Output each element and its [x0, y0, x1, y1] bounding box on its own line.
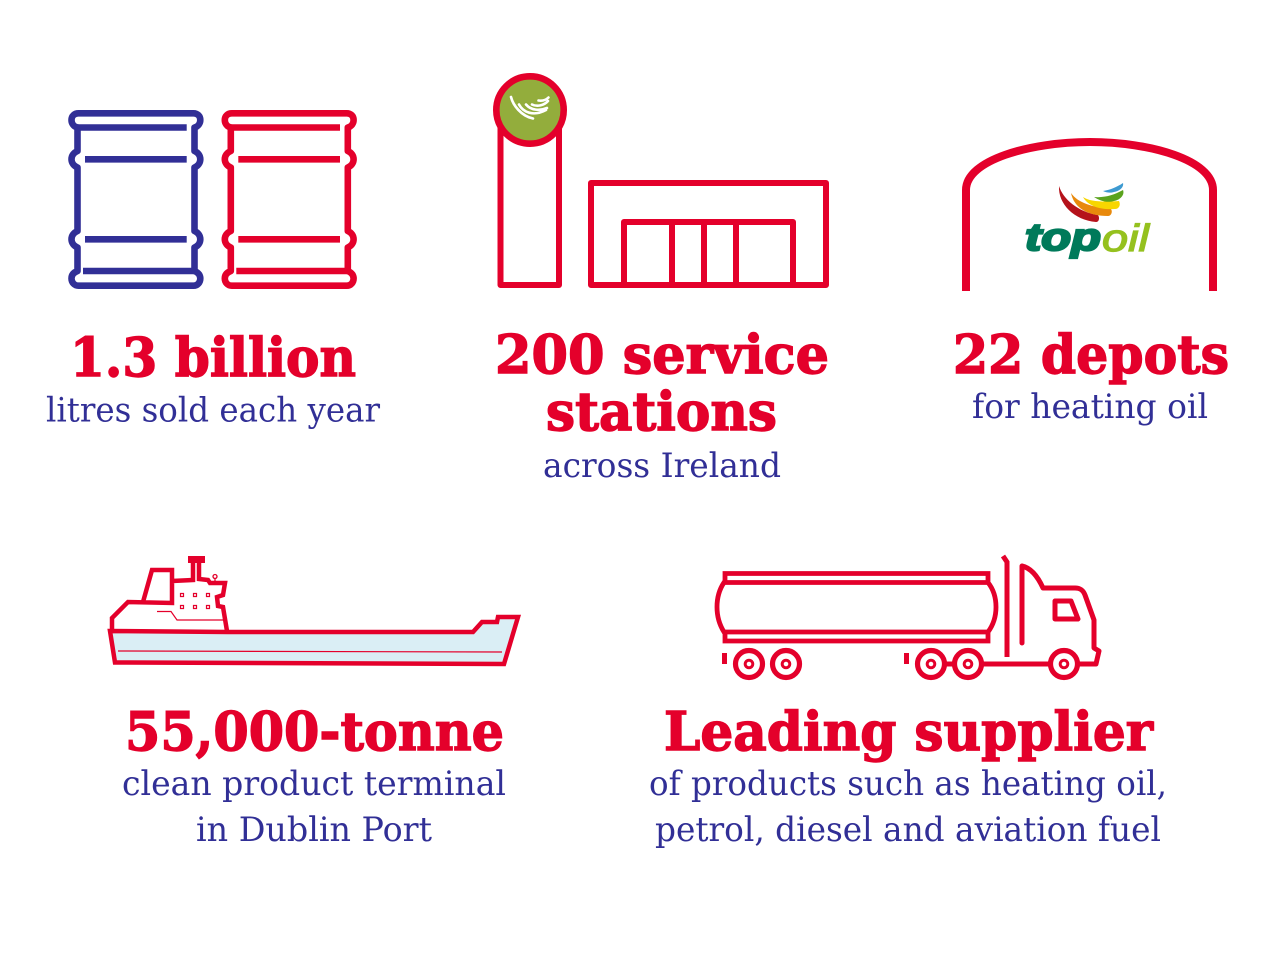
- ship funnel top: [188, 556, 205, 563]
- truck cab: [945, 566, 1099, 664]
- text: clean product terminal: clean product terminal: [122, 764, 506, 804]
- heading: 22 depots: 22 depots: [953, 324, 1229, 386]
- icon: tanker truck: [717, 556, 1099, 678]
- text: in Dublin Port: in Dublin Port: [196, 810, 432, 850]
- icon: tanker ship: [110, 556, 518, 664]
- ship superstructure: [112, 560, 227, 631]
- truck wheels: [736, 650, 1078, 678]
- text: petrol, diesel and aviation fuel: petrol, diesel and aviation fuel: [655, 810, 1161, 850]
- text: litres sold each year: litres sold each year: [46, 390, 381, 430]
- icon: forecourt totem pole: [500, 125, 559, 285]
- icon: shop building: [591, 183, 826, 285]
- icon: service station: [496, 76, 826, 285]
- panel: product terminal: [110, 556, 518, 850]
- text: across Ireland: across Ireland: [543, 446, 781, 486]
- ship deck lines: [118, 612, 502, 652]
- heading: Leading supplier: Leading supplier: [664, 701, 1154, 763]
- heading: 200 service: 200 service: [495, 324, 829, 386]
- text: of products such as heating oil,: of products such as heating oil,: [649, 764, 1167, 804]
- icon: Top Oil logo: top: [1025, 217, 1101, 259]
- panel: depots: [953, 142, 1229, 427]
- heading: 55,000-tonne: 55,000-tonne: [125, 701, 504, 763]
- icon: red oil barrel: [225, 113, 354, 286]
- truck mudflaps: [722, 653, 909, 664]
- heading: 1.3 billion: 1.3 billion: [70, 327, 356, 389]
- panel: leading supplier: [649, 556, 1167, 850]
- truck exhaust: [1003, 556, 1007, 657]
- text: for heating oil: for heating oil: [972, 387, 1208, 427]
- ship windows: [180, 594, 210, 608]
- icon: totem logo roundel: [496, 76, 564, 144]
- ship mast: [213, 574, 217, 582]
- panel: service stations: [495, 76, 829, 486]
- truck tank: [717, 574, 996, 641]
- heading: stations: stations: [546, 381, 777, 443]
- icon: Top Oil logo: [1025, 183, 1151, 260]
- ship hull: [110, 617, 518, 664]
- icon: storage depot tank: [966, 142, 1213, 291]
- icon: Top Oil logo: oil: [1102, 218, 1151, 260]
- panel: litres sold: [46, 113, 381, 431]
- icon: blue oil barrel: [72, 113, 200, 286]
